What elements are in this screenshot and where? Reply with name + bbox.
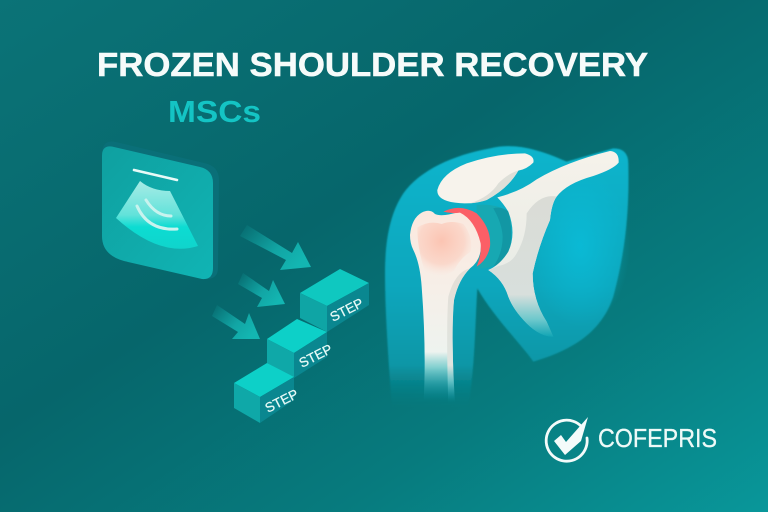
step: top: STEP [328,295,366,325]
clavicle bone [437,153,534,203]
arrow: middle [238,273,285,307]
logo: COFEPRIS [546,417,717,461]
ultrasound probe line [134,170,177,180]
shoulder body silhouette [385,146,628,407]
ultrasound fan [116,181,198,249]
step: middle: STEP [297,341,335,371]
icon: check in circle [546,417,588,461]
arrow: upper [240,225,311,270]
logo wordmark: COFEPRIS [598,425,717,453]
ultrasound echo arcs [137,200,177,229]
step: top [300,269,369,332]
humerus bone [410,211,481,407]
inflamed cartilage [443,208,490,267]
arrow: lower [212,305,260,339]
step: bottom: STEP [263,386,301,416]
shoulder anatomy illustration [385,146,630,407]
blade highlight [530,167,630,327]
subtitle: MSCs: MSCs [168,94,261,129]
joint capsule [477,205,512,269]
title: FROZEN SHOULDER RECOVERY [97,47,648,84]
icon: ultrasound panel [102,142,219,279]
steps staircase [234,269,369,423]
step: middle [267,319,335,378]
step: bottom [234,363,301,423]
scapula bone [488,151,619,337]
